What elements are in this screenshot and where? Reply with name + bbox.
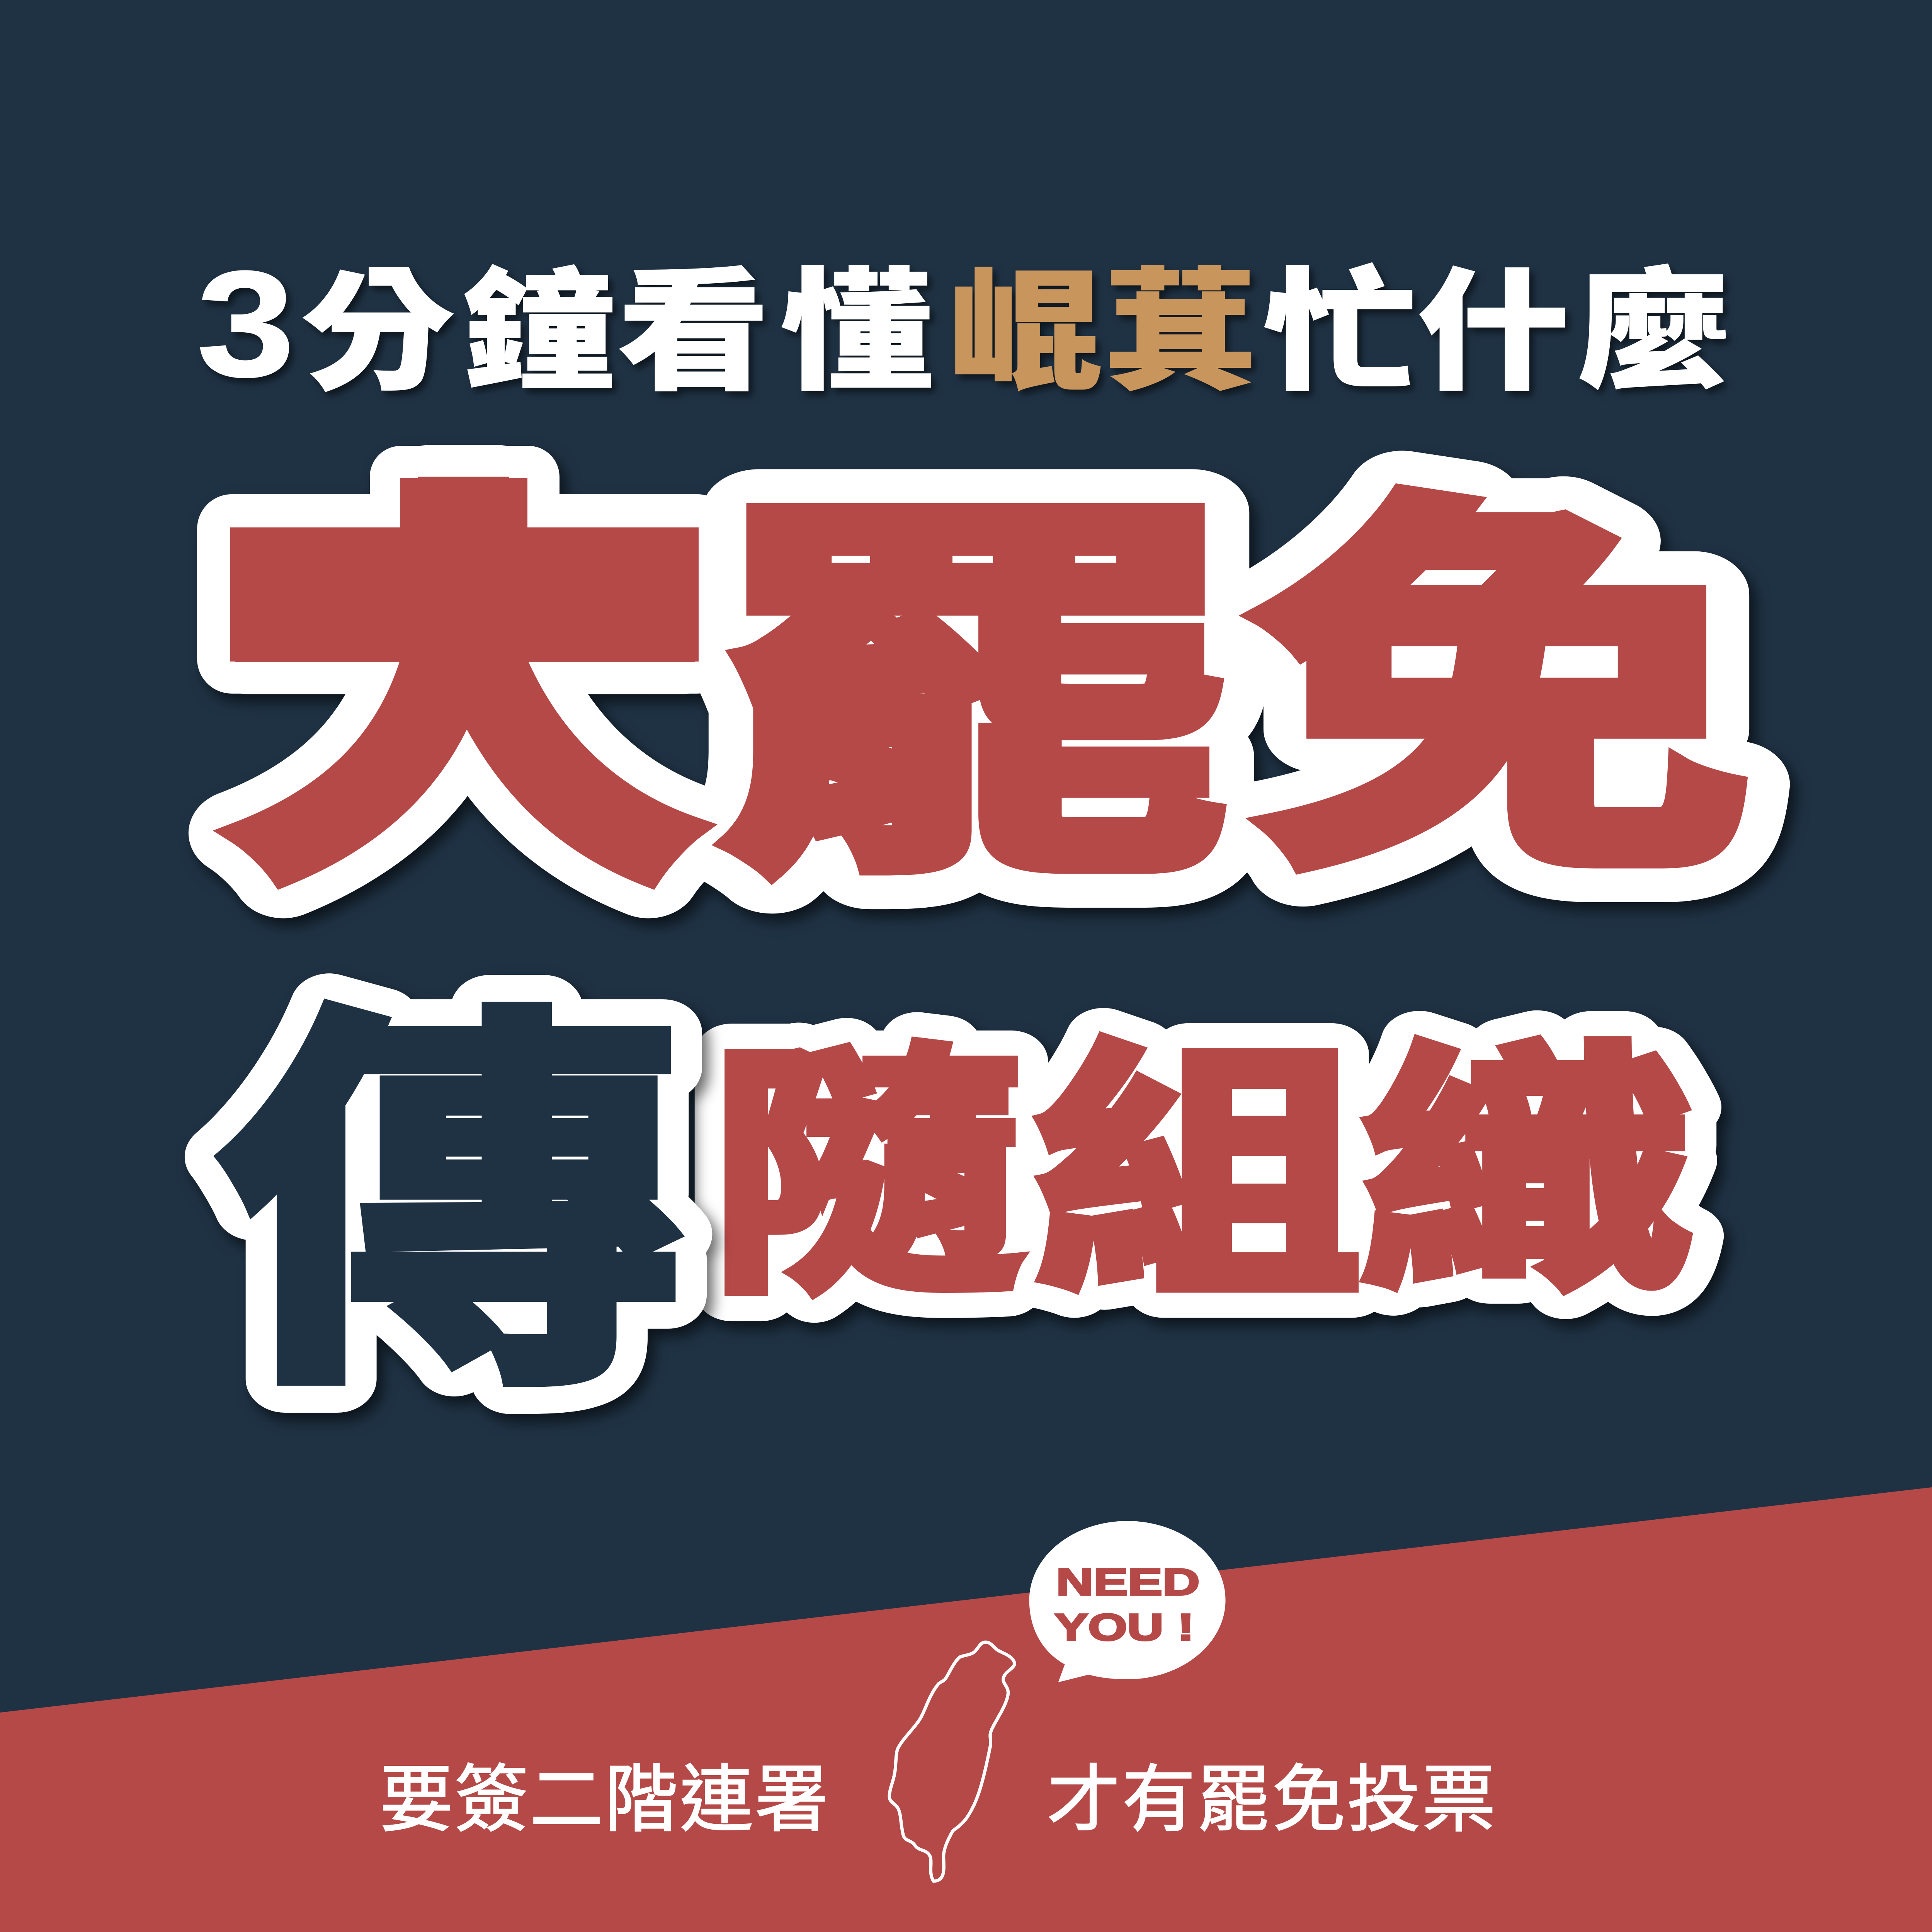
title: 3分鐘看懂崐萁忙什麼: 3 (197, 240, 295, 408)
headline white sticker outline: 大 (221, 465, 707, 927)
title: 3分鐘看懂崐萁忙什麼: 崐 (949, 259, 1101, 406)
headline white sticker outline: 免 (1250, 474, 1751, 915)
subheadline red lettering (711, 1026, 1693, 1324)
headline red lettering: 罷 (714, 478, 1235, 918)
subheadline white sticker outline: 組 (1034, 1026, 1362, 1324)
subheadline red lettering: 隨 (711, 1030, 1024, 1323)
subheadline: 隨組織 (711, 1026, 1693, 1324)
icon: Taiwan island outline (889, 1642, 1015, 1881)
title: 3分鐘看懂崐萁忙什麼: 萁 (1104, 259, 1257, 406)
headline white sticker outline: 罷 (714, 478, 1235, 918)
title: 3分鐘看懂崐萁忙什麼: 麼 (1576, 259, 1728, 406)
headline red lettering (221, 465, 1751, 927)
headline: 大罷免 (197, 446, 1751, 927)
title: 3分鐘看懂崐萁忙什麼: 什 (1417, 259, 1570, 406)
subheadline red lettering: 組 (1034, 1026, 1362, 1324)
傳 white sticker outline: 傳 (220, 984, 681, 1429)
red diagonal footer band (0, 1487, 1932, 1932)
YOU! label: YOU ! (1054, 1606, 1194, 1648)
headline red lettering: 免 (1250, 474, 1751, 915)
subheadline red lettering: 織 (1359, 1026, 1693, 1324)
title: 3分鐘看懂崐萁忙什麼: 鐘 (463, 259, 615, 406)
傳 navy lettering: 傳 (220, 984, 681, 1429)
subheadline white sticker outline: 隨 (711, 1030, 1024, 1323)
bubble shape (1029, 1521, 1226, 1682)
title: 3分鐘看懂崐萁忙什麼 (197, 240, 1728, 408)
headline white sticker outline (197, 446, 1751, 927)
headline red lettering: 大 (221, 465, 707, 927)
footer text right: 才有罷免投票: 才有罷免投票 (1047, 1759, 1495, 1841)
subheadline white sticker outline: 織 (1359, 1026, 1693, 1324)
title: 3分鐘看懂崐萁忙什麼: 懂 (780, 259, 932, 406)
title: 3分鐘看懂崐萁忙什麼: 分 (302, 259, 454, 406)
footer text left: 要簽二階連署: 要簽二階連署 (379, 1759, 828, 1841)
title: 3分鐘看懂崐萁忙什麼: 看 (617, 259, 770, 406)
subheadline white sticker outline (711, 1026, 1693, 1324)
NEED label: NEED (1056, 1561, 1200, 1603)
speech bubble: NEED YOU! (1029, 1521, 1226, 1682)
large character: 傳 (220, 984, 681, 1429)
title: 3分鐘看懂崐萁忙什麼: 忙 (1263, 259, 1415, 406)
